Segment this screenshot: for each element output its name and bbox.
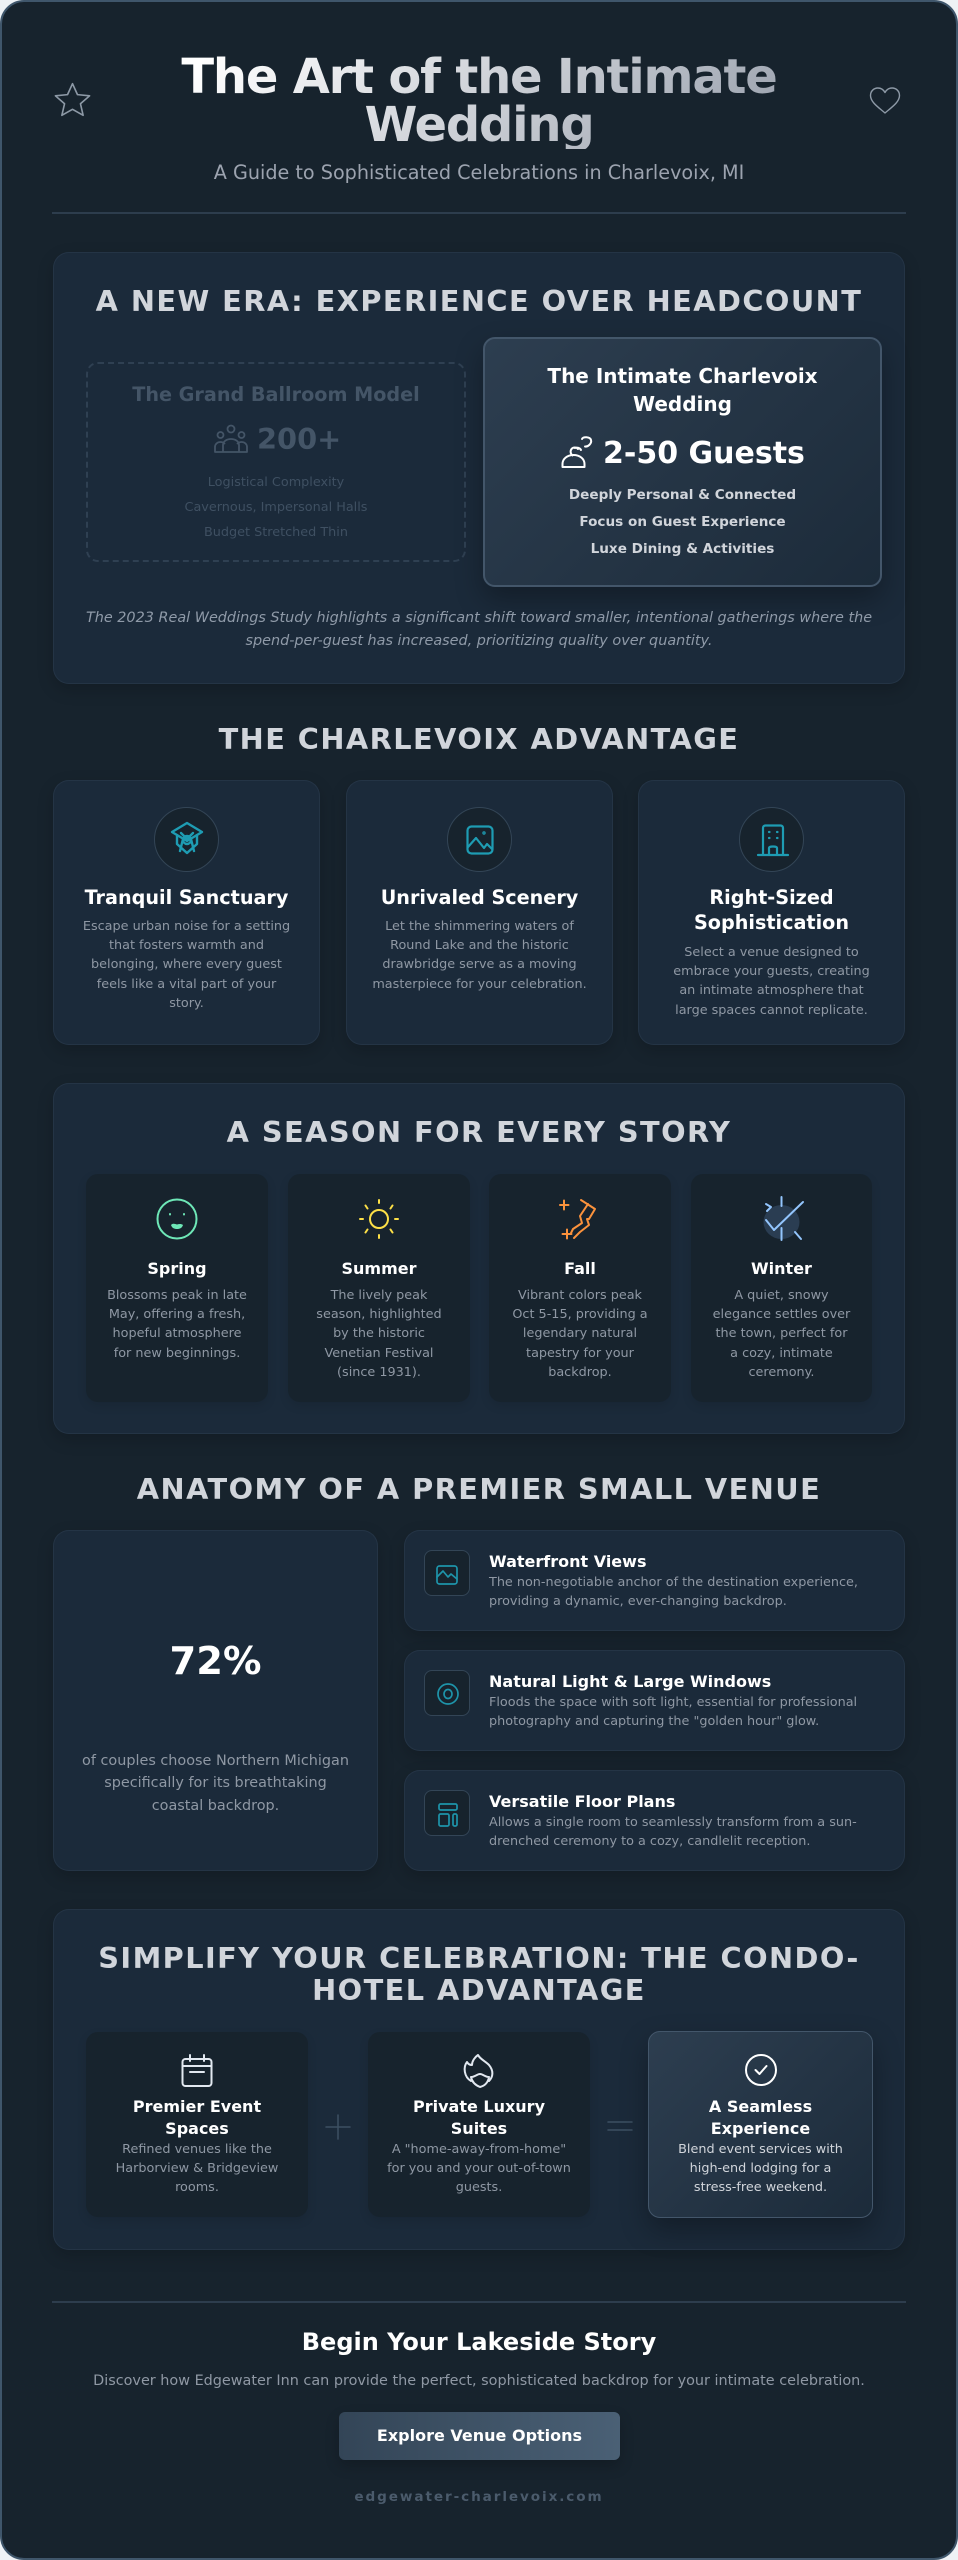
item text: Floods the space with soft light, essential for professional	[489, 1695, 857, 1710]
card: summer	[288, 1174, 470, 1402]
card text: Escape urban noise for a setting	[83, 919, 290, 934]
card text: story.	[169, 996, 204, 1011]
note: study	[86, 610, 872, 649]
list: intimate benefits: Deeply Personal & Connected	[569, 487, 796, 503]
item text	[489, 1815, 857, 1849]
icon: suites	[464, 2054, 494, 2088]
card: right-sized sophistication	[638, 780, 905, 1045]
icon: image	[424, 1550, 470, 1596]
icon: heart	[870, 87, 900, 114]
icon: layout	[424, 1790, 470, 1836]
card text: for you and your out-of-town	[387, 2161, 571, 2176]
card title	[709, 2097, 812, 2138]
card text: masterpiece for your celebration.	[372, 977, 587, 992]
season name: Spring	[147, 1259, 207, 1278]
operator: equals	[607, 2121, 633, 2131]
card title: Premier Event	[133, 2097, 261, 2116]
stat: 200+	[214, 422, 341, 456]
card title	[133, 2097, 261, 2138]
card title: Tranquil Sanctuary	[85, 886, 288, 909]
card title	[694, 886, 849, 934]
season name: Winter	[751, 1259, 812, 1278]
season text: ceremony.	[748, 1365, 814, 1380]
card: seamless experience	[648, 2031, 873, 2218]
value: 2-50 Guests	[603, 436, 805, 471]
card: waterfront views	[404, 1530, 905, 1631]
website: edgewater-charlevoix.com	[354, 2489, 604, 2505]
title: The Art of the Intimate	[181, 49, 777, 105]
season text: May, offering a fresh,	[109, 1307, 245, 1322]
icon: crowd	[214, 424, 248, 453]
value: 72%	[170, 1639, 261, 1684]
icon: winter	[764, 1196, 804, 1241]
season text: Oct 5-15, providing a	[512, 1307, 648, 1322]
list: intimate benefits: Focus on Guest Experience	[579, 514, 786, 530]
list: ballroom drawbacks: Logistical Complexity	[208, 475, 344, 490]
panel: 72 percent stat	[53, 1530, 378, 1871]
season text: by the historic	[333, 1326, 425, 1341]
subtitle: A Guide to Sophisticated Celebrations in Charlevoix, MI	[214, 161, 744, 184]
season text: a cozy, intimate	[730, 1346, 833, 1361]
panel: a new era	[53, 252, 905, 684]
heading: intimate	[547, 364, 818, 416]
heading: condo-hotel	[98, 1941, 860, 2007]
card title: Sophistication	[694, 911, 849, 934]
comparison: grand ballroom model	[86, 362, 466, 562]
icon: calendar	[182, 2054, 212, 2087]
season name: Fall	[564, 1259, 596, 1278]
card text	[678, 2142, 843, 2195]
item title: Waterfront Views	[489, 1552, 646, 1571]
footer heading: Begin Your Lakeside Story	[302, 2328, 656, 2356]
season text: Venetian Festival	[325, 1346, 433, 1361]
card text: drawbridge serve as a moving	[382, 957, 577, 972]
season text: (since 1931).	[337, 1365, 421, 1380]
item text	[489, 1695, 857, 1729]
item title: Natural Light & Large Windows	[489, 1672, 771, 1691]
card text: Refined venues like the	[122, 2142, 272, 2157]
comparison: intimate charlevoix wedding	[483, 337, 882, 587]
card text: an intimate atmosphere that	[679, 983, 864, 998]
icon: star	[54, 82, 90, 116]
item text: drenched ceremony to a cozy, candlelit reception.	[489, 1834, 810, 1849]
card title: Suites	[451, 2119, 507, 2138]
card: fall	[489, 1174, 671, 1402]
season text: legendary natural	[523, 1326, 637, 1341]
card: tranquil sanctuary	[53, 780, 320, 1045]
card title: A Seamless	[709, 2097, 812, 2116]
season text: for new beginnings.	[114, 1346, 240, 1361]
card text: Let the shimmering waters of	[385, 919, 574, 934]
icon: scenery	[447, 807, 512, 872]
season text: Vibrant colors peak	[518, 1288, 642, 1303]
card: premier event spaces	[86, 2032, 308, 2217]
card title: Unrivaled Scenery	[381, 886, 578, 909]
item text: providing a dynamic, ever-changing backdrop.	[489, 1594, 787, 1609]
season text: Blossoms peak in late	[107, 1288, 247, 1303]
season text	[713, 1288, 850, 1380]
season text: backdrop.	[548, 1365, 612, 1380]
season text: hopeful atmosphere	[113, 1326, 241, 1341]
card title: Right-Sized	[709, 886, 834, 909]
note: study: The 2023 Real Weddings Study highlights a significant shift toward smaller, intentional gatherings where the	[86, 610, 872, 626]
card text: belonging, where every guest	[91, 957, 282, 972]
heading: a new era: A NEW ERA: EXPERIENCE OVER HEADCOUNT	[96, 284, 862, 318]
card text: Select a venue designed to	[684, 945, 859, 960]
item text: photography and capturing the "golden hour" glow.	[489, 1714, 819, 1729]
card: spring	[86, 1174, 268, 1402]
heading: anatomy: ANATOMY OF A PREMIER SMALL VENUE	[137, 1472, 821, 1506]
card text	[673, 945, 870, 1018]
card text: stress-free weekend.	[694, 2180, 827, 2195]
card: unrivaled scenery	[346, 780, 613, 1045]
icon: check	[745, 2054, 777, 2086]
card text: large spaces cannot replicate.	[675, 1003, 868, 1018]
footer text: Discover how Edgewater Inn can provide the perfect, sophisticated backdrop for your intimate celebration.	[93, 2373, 865, 2389]
heading: ballroom: The Grand Ballroom Model	[132, 383, 420, 406]
card: winter	[691, 1174, 872, 1402]
item title: Versatile Floor Plans	[489, 1792, 675, 1811]
season name: Summer	[342, 1259, 416, 1278]
stat text	[82, 1753, 349, 1814]
season text: the town, perfect for	[716, 1326, 847, 1341]
button: explore venue options: Explore Venue Options	[377, 2426, 582, 2445]
title: Wedding	[364, 97, 594, 153]
list: ballroom drawbacks: Cavernous, Impersonal Halls	[185, 500, 367, 515]
item text	[488, 1575, 858, 1609]
card: natural light	[404, 1650, 905, 1751]
season text: season, highlighted	[316, 1307, 442, 1322]
note: study: spend-per-guest has increased, prioritizing quality over quantity.	[245, 633, 713, 649]
season text: The lively peak	[331, 1288, 427, 1303]
season text	[316, 1288, 442, 1380]
list: ballroom drawbacks: Budget Stretched Thin	[204, 525, 348, 540]
icon: building	[739, 807, 804, 872]
heading: intimate: The Intimate Charlevoix	[547, 364, 818, 388]
season text	[107, 1288, 247, 1361]
icon: sun	[359, 1199, 399, 1239]
card text	[83, 919, 290, 1011]
season text: A quiet, snowy	[734, 1288, 829, 1303]
card text	[116, 2142, 278, 2195]
heading: seasons: A SEASON FOR EVERY STORY	[227, 1115, 731, 1149]
heading: charlevoix advantage: THE CHARLEVOIX ADVANTAGE	[219, 722, 739, 756]
list: ballroom drawbacks	[185, 475, 367, 540]
card text: feels like a vital part of your	[97, 977, 276, 992]
season text	[512, 1288, 648, 1380]
list: intimate benefits	[569, 487, 796, 557]
card text	[387, 2142, 571, 2195]
card title: Spaces	[165, 2119, 229, 2138]
card title	[413, 2097, 545, 2138]
panel: seasons	[53, 1083, 905, 1434]
button: explore venue options	[339, 2412, 620, 2460]
card title: Experience	[711, 2119, 810, 2138]
item text: The non-negotiable anchor of the destination experience,	[489, 1575, 858, 1590]
season text: tapestry for your	[526, 1346, 634, 1361]
value: 200+	[257, 422, 341, 456]
card: versatile floor plans	[404, 1770, 905, 1871]
heading: condo-hotel: HOTEL ADVANTAGE	[312, 1973, 646, 2007]
title	[130, 53, 828, 149]
card text	[372, 919, 587, 992]
card text: Harborview & Bridgeview	[116, 2161, 278, 2176]
icon: couple	[562, 436, 592, 468]
card: private luxury suites	[368, 2032, 590, 2217]
card title: Private Luxury	[413, 2097, 545, 2116]
card text: A "home-away-from-home"	[392, 2142, 566, 2157]
icon: sanctuary	[154, 807, 219, 872]
stat text: specifically for its breathtaking	[104, 1775, 327, 1791]
icon: eye	[424, 1670, 470, 1716]
operator: plus	[325, 2114, 351, 2140]
heading: condo-hotel: SIMPLIFY YOUR CELEBRATION: THE CONDO-	[98, 1941, 860, 1975]
card text: that fosters warmth and	[109, 938, 264, 953]
heading: intimate: Wedding	[633, 392, 732, 416]
card text: embrace your guests, creating	[673, 964, 870, 979]
card text: high-end lodging for a	[690, 2161, 831, 2176]
season text: elegance settles over	[713, 1307, 850, 1322]
icon: fall	[559, 1199, 596, 1240]
list: intimate benefits: Luxe Dining & Activities	[591, 541, 774, 557]
stat: 2-50 guests	[562, 436, 805, 471]
card text: Round Lake and the historic	[390, 938, 569, 953]
panel: condo-hotel advantage	[53, 1909, 905, 2250]
icon: spring	[156, 1198, 198, 1240]
card text: rooms.	[175, 2180, 219, 2195]
card text: guests.	[456, 2180, 502, 2195]
item text: Allows a single room to seamlessly transform from a sun-	[489, 1815, 857, 1830]
card text: Blend event services with	[678, 2142, 843, 2157]
stat text: coastal backdrop.	[152, 1798, 279, 1814]
stat text: of couples choose Northern Michigan	[82, 1753, 349, 1769]
